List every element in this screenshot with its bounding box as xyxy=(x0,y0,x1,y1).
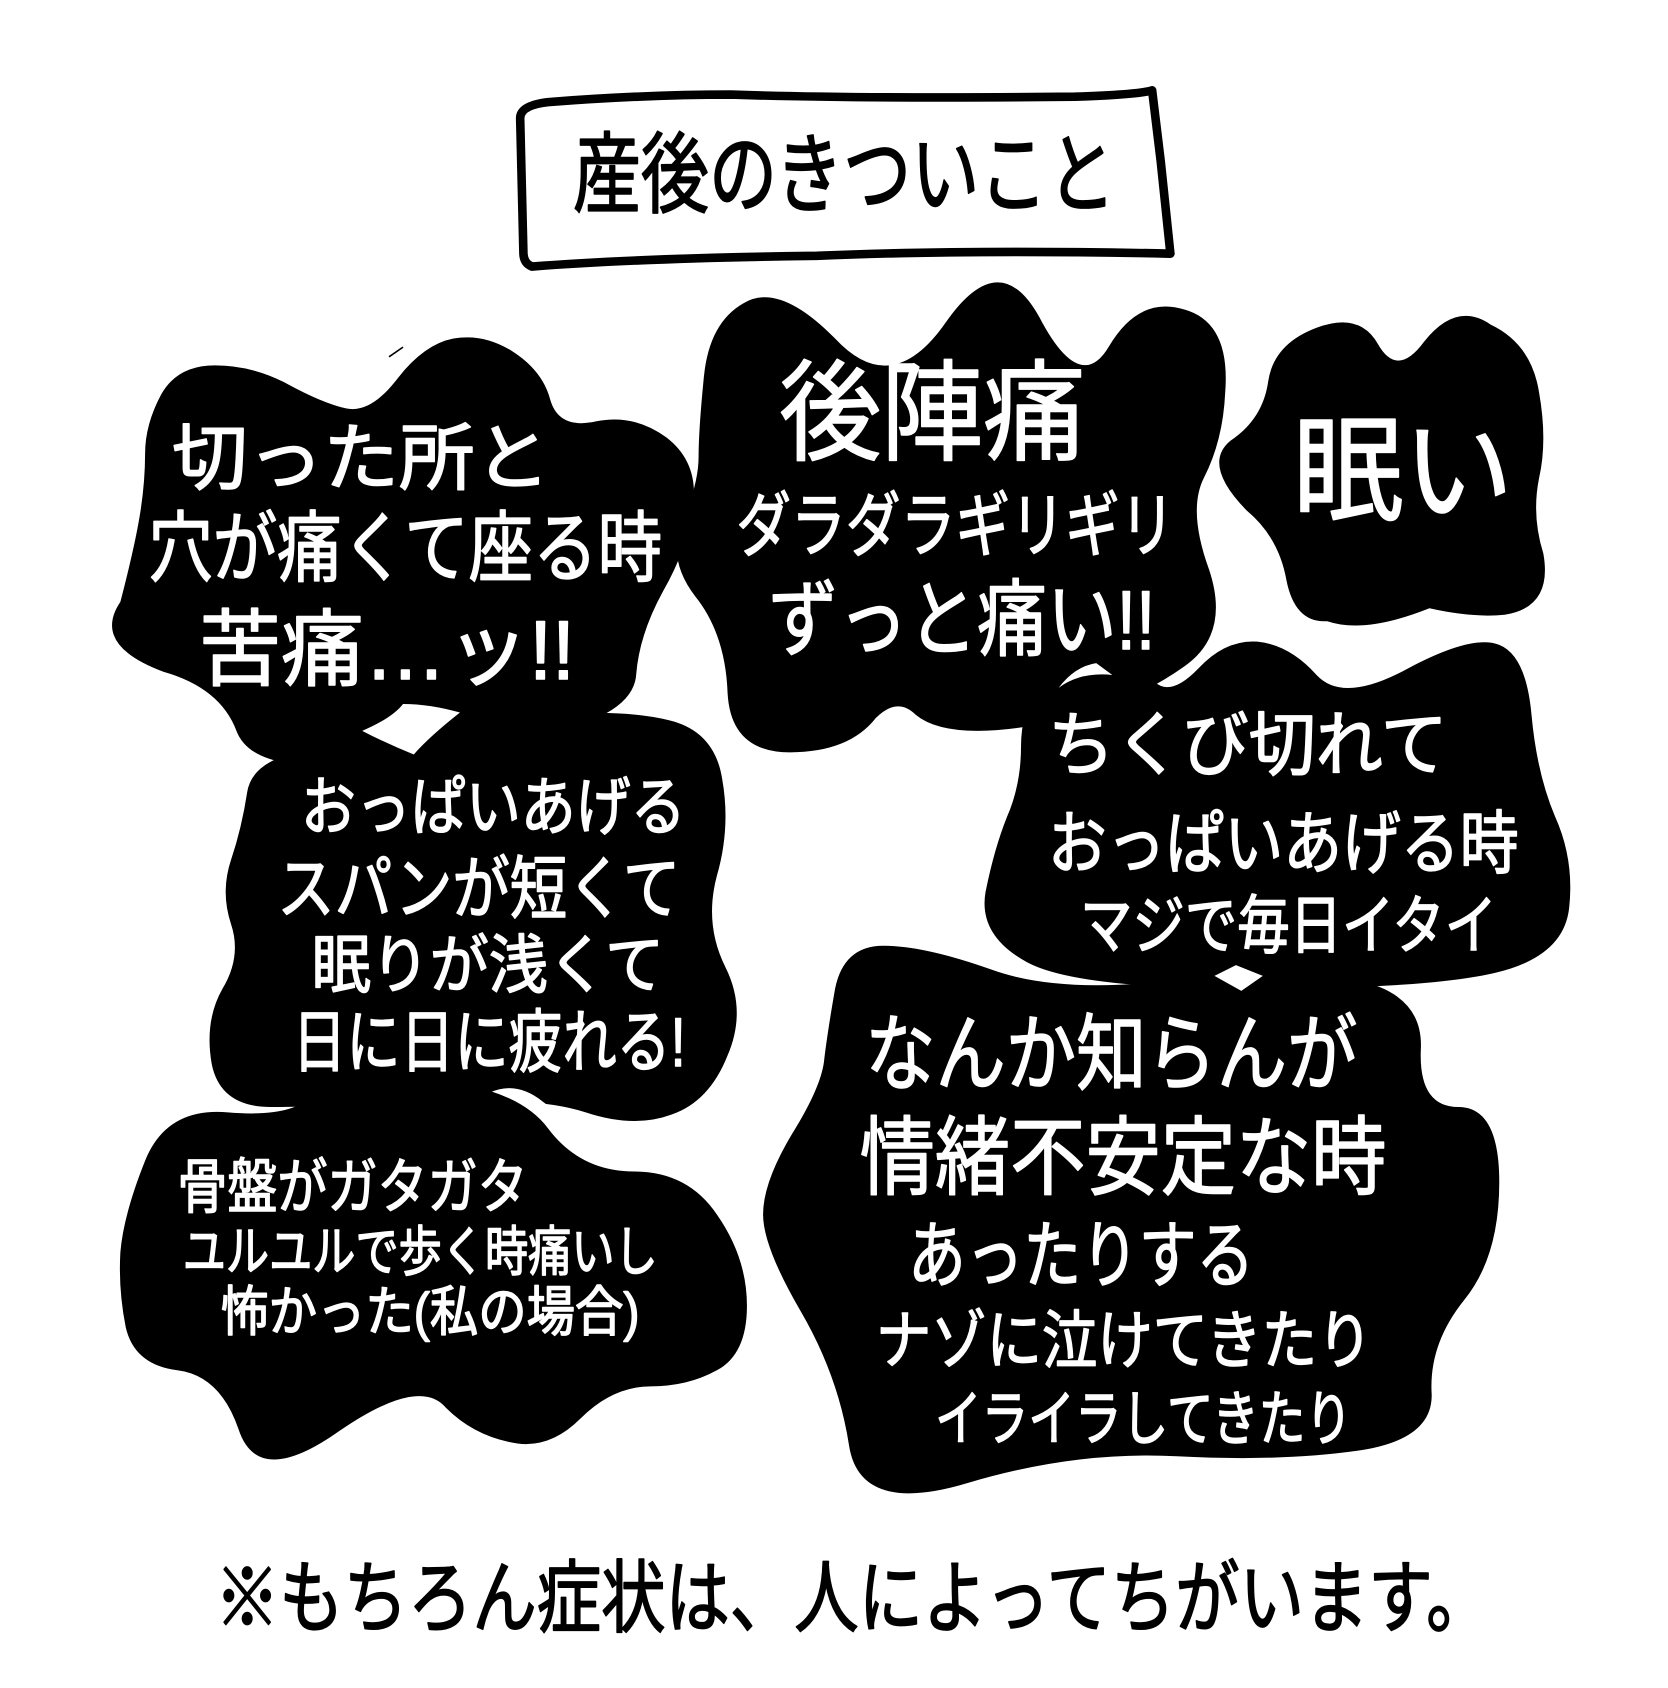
panel: nipple cuts: ちくび切れて xyxy=(1048,707,1448,786)
panel: breastfeeding interval: おっぱいあげる xyxy=(301,772,686,844)
panel: sleepy xyxy=(1219,316,1545,626)
panel: emotional instability: 情緒不安定な時 xyxy=(860,1111,1386,1207)
panel: sleepy: 眠い xyxy=(1293,407,1513,537)
panel: afterpains: ダラダラギリギリ xyxy=(736,487,1175,566)
small stray stroke xyxy=(389,347,403,357)
panel: nipple cuts: マジで毎日イタイ xyxy=(1080,890,1497,962)
panel: stitches and tears hurt when sitting: 切った所と xyxy=(172,419,550,500)
panel: emotional instability xyxy=(763,946,1499,1493)
panel: emotional instability: イライラしてきたり xyxy=(935,1386,1352,1453)
panel: pelvis xyxy=(120,1079,747,1460)
panel: afterpains: ずっと痛い!! xyxy=(768,573,1155,667)
title box: 産後のきついこと xyxy=(573,125,1116,224)
panel: nipple cuts xyxy=(985,641,1570,989)
panel: emotional instability: あったりする xyxy=(908,1216,1254,1297)
panel: breastfeeding interval: 眠りが浅くて xyxy=(312,930,664,1002)
title box xyxy=(520,90,1170,267)
panel: pelvis: 怖かった(私の場合) xyxy=(220,1283,639,1343)
panel: pelvis: ユルユルで歩く時痛いし xyxy=(183,1222,658,1282)
panel: emotional instability: なんか知らんが xyxy=(865,1007,1357,1101)
panel: pelvis: 骨盤がガタガタ xyxy=(177,1154,528,1221)
white gaps between clouds xyxy=(362,663,1263,1182)
panel: stitches and tears hurt when sitting: 穴が痛くて座る時 xyxy=(148,506,662,592)
panel: breastfeeding interval xyxy=(210,713,737,1121)
panel: afterpains xyxy=(677,282,1226,752)
panel: afterpains: 後陣痛 xyxy=(779,353,1085,475)
panel: breastfeeding interval: スパンが短くて xyxy=(277,850,680,927)
panel: stitches and tears hurt when sitting xyxy=(112,337,694,765)
panel: stitches and tears hurt when sitting: 苦痛…ッ!! xyxy=(199,603,575,697)
panel: emotional instability: ナゾに泣けてきたり xyxy=(876,1305,1372,1377)
panel: breastfeeding interval: 日に日に疲れる! xyxy=(292,1004,686,1081)
panel: nipple cuts: おっぱいあげる時 xyxy=(1048,805,1519,882)
